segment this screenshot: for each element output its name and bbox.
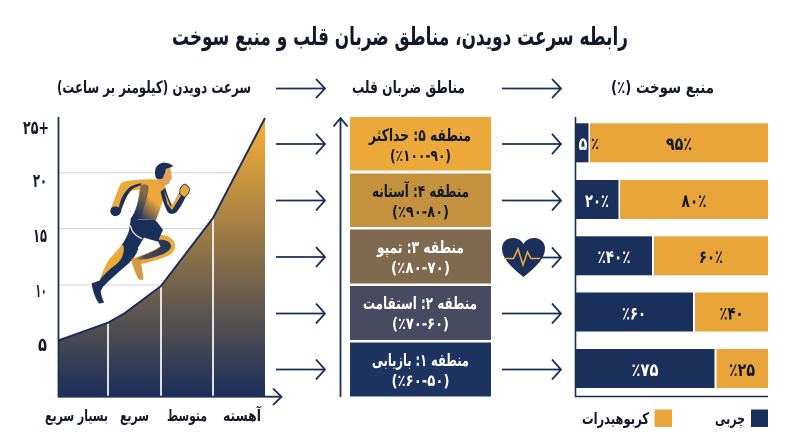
heading: heart rate zones: مناطق ضربان قلب (352, 78, 465, 98)
panel: fuel source bars (576, 117, 768, 396)
zone 3 (350, 230, 491, 284)
zone 5 (350, 117, 491, 170)
bar: zone 3 fuel: ۶۰٪ (699, 247, 723, 268)
bar: zone 1 fuel: ٪۷۵ (632, 360, 659, 381)
zone 1: منطقه ۱: بازیابی (372, 351, 469, 371)
arrows: speed to zones (276, 134, 325, 380)
y axis labels: ۲۰ (33, 170, 47, 192)
zone 3: منطقه ۳: تمپو (376, 238, 464, 258)
bar: zone 2 fuel (576, 292, 768, 332)
icon: heart with pulse (502, 238, 545, 277)
zone 2: منطقه ۲: استقامت (363, 294, 477, 314)
bar: zone 5 fuel: ٪ (591, 134, 599, 153)
panel: speed chart (23, 117, 282, 425)
x axis labels: سریع (120, 406, 149, 425)
zone 5: (٪۱۰۰-۹۰) (390, 146, 451, 165)
heading: fuel source: منبع سوخت (٪) (611, 78, 714, 98)
zone 4 (350, 174, 491, 227)
bar: zone 2 fuel: ٪۴۰ (720, 304, 744, 324)
bar: zone 4 fuel: ۲۰٪ (585, 191, 609, 212)
zone 1 (350, 342, 491, 396)
y axis labels: ۱۵ (33, 225, 47, 247)
zone 4: (٪۹۰-۸۰) (392, 202, 449, 221)
bar: zone 2 fuel: ٪۶۰ (622, 304, 646, 324)
speed category separators (108, 218, 213, 396)
bar: zone 4 fuel (576, 180, 768, 219)
chart axes (58, 117, 282, 405)
bar: zone 5 fuel (576, 123, 768, 162)
y axis labels: ۱۰ (36, 280, 46, 302)
zone 2: (٪۷۰-۶۰) (392, 314, 449, 333)
bar: zone 1 fuel (576, 349, 768, 388)
grid lines (60, 173, 232, 285)
area under speed curve (58, 118, 265, 396)
panel: heart rate zones (350, 117, 491, 396)
heading: running speed: سرعت دویدن (کیلومتر بر ساعت) (57, 78, 251, 98)
y axis labels: ۵ (38, 334, 47, 356)
y axis labels: ۲۵+ (23, 117, 49, 139)
legend (582, 409, 768, 429)
fuel chart axes (576, 117, 768, 396)
legend: fat: چربی (715, 409, 745, 429)
x axis labels: بسیار سریع (45, 406, 108, 425)
arrow: header zones to fuel (502, 79, 561, 98)
y axis labels (23, 117, 49, 356)
zone 1: (٪۶۰-۵۰) (392, 371, 449, 390)
speed curve (58, 118, 265, 340)
bar: zone 5 fuel: ۵ (578, 134, 588, 155)
axis arrow: increasing zones (334, 118, 348, 397)
bar: zone 5 fuel: ۹۵٪ (666, 134, 692, 155)
x axis labels (45, 405, 261, 425)
zone 3: (٪۸۰-۷۰) (391, 258, 450, 277)
x axis labels: متوسط (167, 406, 207, 425)
zone 5: منطقه ۵: حداکثر (368, 126, 471, 146)
bar: zone 3 fuel: ٪۴۰٪ (598, 247, 630, 268)
arrow: header speed to zones (276, 79, 325, 98)
legend: carbohydrates: کربوهیدرات (582, 409, 650, 428)
arrows: zones to fuel (502, 134, 561, 380)
icon: runner (92, 163, 190, 304)
bar: zone 1 fuel: ٪۲۵ (729, 360, 755, 381)
x axis labels: آهسته (223, 405, 261, 425)
zone 2 (350, 286, 491, 340)
bar: zone 4 fuel: ۸۰٪ (682, 191, 706, 212)
zone 4: منطقه ۴: آستانه (372, 180, 469, 202)
bar: zone 3 fuel (576, 236, 768, 275)
